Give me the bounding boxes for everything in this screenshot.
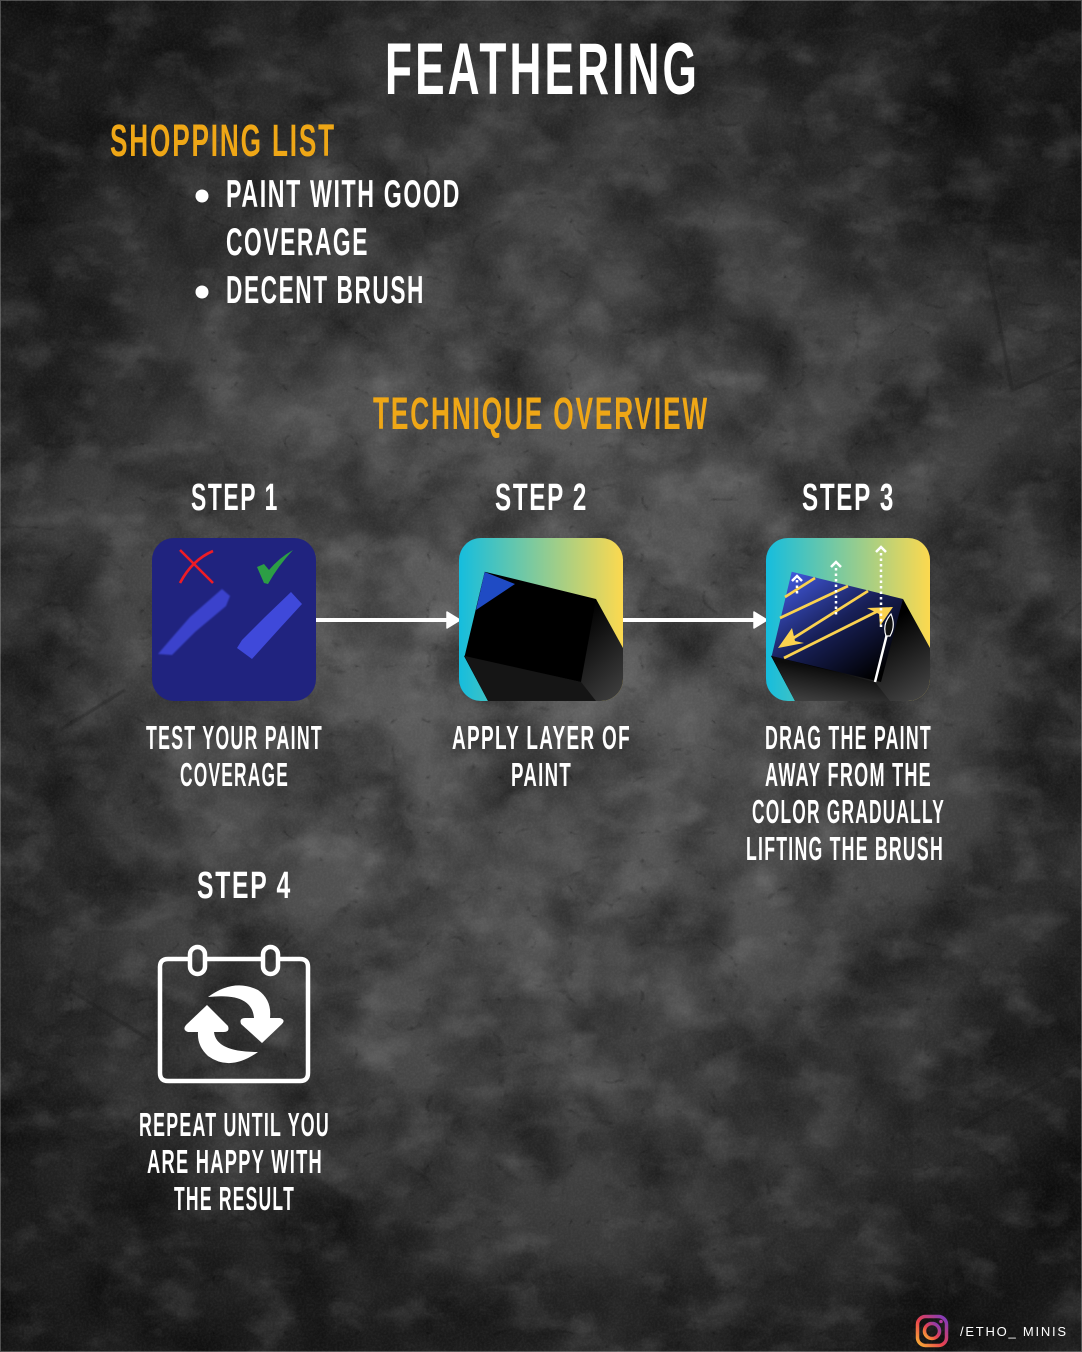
step 4 label: STEP 4 (197, 865, 292, 907)
step 4 caption (139, 1106, 330, 1217)
step 2 caption (452, 719, 631, 793)
shopping list items (196, 173, 461, 312)
step 2 label: STEP 2 (495, 477, 588, 519)
step 3 label: STEP 3 (802, 477, 895, 519)
icon: step 4 calendar with repeat arrows (160, 947, 308, 1081)
step 1 label: STEP 1 (191, 477, 279, 519)
shopping list items: PAINT WITH GOOD (226, 173, 461, 216)
step 4 caption: ARE HAPPY WITH (147, 1143, 323, 1180)
icon: step 2 apply layer of paint (459, 538, 623, 701)
icon: step 1 paint coverage test (152, 538, 316, 701)
shopping list items: DECENT BRUSH (226, 269, 425, 312)
heading: shopping list: SHOPPING LIST (110, 115, 336, 166)
step 1 caption: COVERAGE (180, 756, 289, 793)
step 3 caption: DRAG THE PAINT (765, 719, 932, 756)
step 1 caption (146, 719, 323, 793)
shopping list items: COVERAGE (226, 221, 369, 264)
step 2 caption: APPLY LAYER OF (452, 719, 631, 756)
step 3 caption: AWAY FROM THE (765, 756, 932, 793)
step 3 caption (746, 719, 945, 867)
step 2 caption: PAINT (511, 756, 572, 793)
heading: technique overview: TECHNIQUE OVERVIEW (373, 388, 709, 439)
icon: step 3 drag the paint (766, 538, 930, 701)
arrow: step 2 to step 3 (623, 612, 767, 628)
step 4 caption: THE RESULT (174, 1180, 295, 1217)
step 4 caption: REPEAT UNTIL YOU (139, 1106, 330, 1143)
icon: instagram (918, 1316, 946, 1346)
title: FEATHERING (385, 29, 700, 110)
step 1 caption: TEST YOUR PAINT (146, 719, 323, 756)
instagram handle: /ETHO_ MINIS (960, 1324, 1066, 1339)
arrow: step 1 to step 2 (316, 612, 460, 628)
